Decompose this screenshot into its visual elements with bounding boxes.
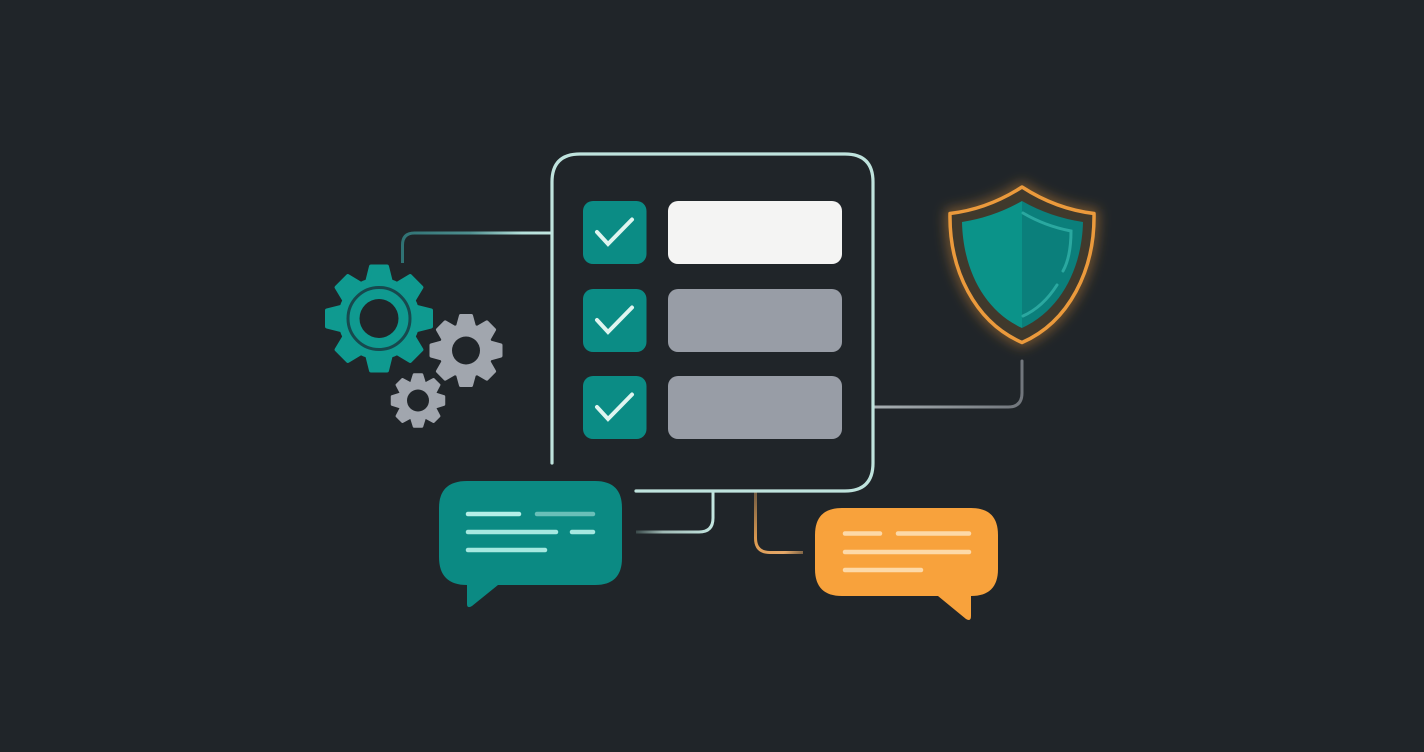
connector: checklist to shield: [873, 361, 1022, 407]
bar: item 2: [668, 289, 842, 352]
icon: medium gray gear: [431, 316, 501, 386]
speech bubble: orange: [815, 508, 998, 620]
bubble text lines: [468, 514, 593, 550]
icon: large teal gear: [327, 266, 431, 370]
icon: checkbox 1: [583, 201, 646, 264]
connector: checklist to teal speech bubble: [636, 491, 713, 532]
connector: checklist to orange speech bubble: [756, 491, 803, 552]
checklist row 1: [583, 201, 842, 264]
speech bubble: teal: [439, 481, 622, 607]
bar: item 3: [668, 376, 842, 439]
checklist row 2: [583, 289, 842, 352]
bubble body: [815, 508, 998, 620]
shield orange outline: [950, 187, 1094, 342]
bubble text lines: [845, 534, 969, 570]
shield left face: [962, 201, 1022, 328]
window outline: [552, 154, 873, 491]
icon: small gray gear: [392, 374, 444, 426]
shield inner backing: [950, 187, 1094, 342]
bar: highlighted item: [668, 201, 842, 264]
shield highlight lower: [1023, 285, 1057, 316]
checklist row 3: [583, 376, 842, 439]
shield highlight upper: [1023, 213, 1071, 271]
icon: checkbox 2: [583, 289, 646, 352]
icon: checkbox 3: [583, 376, 646, 439]
panel: checklist window: [552, 154, 873, 491]
connector: gears to checklist: [402, 233, 552, 263]
shield right face: [1022, 201, 1083, 328]
icon: gears: [327, 266, 501, 426]
bubble body: [439, 481, 622, 607]
icon: shield: [950, 187, 1094, 342]
shield glow: [950, 187, 1094, 342]
